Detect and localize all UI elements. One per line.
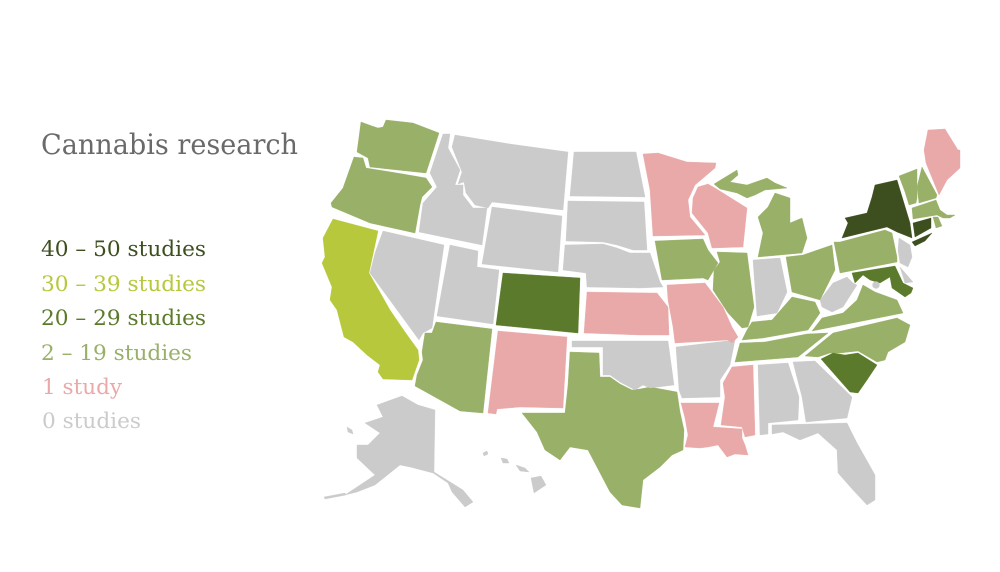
state: Rhode Island [933, 217, 942, 228]
state: Minnesota [643, 153, 716, 236]
state: Virginia [812, 285, 903, 331]
state: Oregon [331, 157, 432, 233]
state: Michigan [714, 170, 807, 257]
Michigan upper peninsula [714, 170, 787, 198]
state: Maryland [852, 266, 913, 297]
legend item: 40 to 50 studies: 40 – 50 studies [41, 237, 206, 262]
state: South Dakota [566, 201, 647, 250]
state: Nevada [370, 231, 444, 340]
title: Cannabis research [41, 128, 298, 161]
state: Florida [772, 423, 875, 505]
legend item: 30 to 39 studies: 30 – 39 studies [41, 272, 206, 297]
state: Kentucky [742, 297, 820, 340]
Michigan lower peninsula [758, 193, 807, 257]
legend item: 2 to 19 studies: 2 – 19 studies [41, 341, 192, 366]
Kauai [483, 451, 488, 456]
legend item: 1 study: 1 study [42, 375, 123, 400]
District of Columbia [872, 282, 880, 288]
state: Indiana [753, 258, 787, 316]
state: Vermont [899, 169, 917, 205]
state: Wyoming [482, 207, 562, 272]
state: Massachusetts [912, 200, 955, 219]
state: Montana [452, 135, 568, 210]
state: Alaska [324, 396, 473, 507]
state: Idaho [419, 134, 487, 245]
state: Connecticut [913, 218, 931, 237]
state: Texas [522, 352, 684, 508]
legend item: 0 studies: 0 studies [42, 409, 141, 434]
Hawaii big island [531, 476, 546, 493]
Maui [516, 465, 529, 472]
state: New Mexico [488, 331, 567, 414]
state: North Dakota [570, 152, 645, 197]
state: Louisiana [681, 403, 748, 457]
state: New York [842, 180, 932, 246]
state: Nebraska [563, 244, 663, 288]
Long Island [912, 233, 932, 246]
state: Colorado [496, 273, 580, 333]
state: Ohio [786, 245, 835, 300]
legend [41, 237, 206, 434]
state: Arkansas [676, 340, 735, 398]
state: New Hampshire [917, 167, 937, 203]
state: Utah [437, 245, 499, 324]
state: Hawaii [483, 451, 546, 493]
state: Mississippi [721, 365, 755, 437]
state: Pennsylvania [834, 230, 897, 273]
state: Delaware [900, 267, 913, 283]
Aleutian islands [324, 493, 346, 499]
Oahu [501, 458, 509, 463]
state: Oklahoma [572, 341, 674, 390]
state: Washington [357, 120, 439, 173]
legend item: 20 to 29 studies: 20 – 29 studies [41, 306, 206, 331]
state: Wisconsin [692, 184, 747, 248]
state: North Carolina [805, 318, 910, 362]
Nunivak island [347, 427, 353, 434]
state: Arizona [415, 322, 492, 413]
state: Kansas [584, 292, 669, 335]
state: Iowa [655, 239, 718, 280]
state: Maine [924, 129, 960, 195]
state: Tennessee [735, 333, 828, 362]
Alaska mainland [345, 396, 473, 507]
state: Illinois [713, 252, 754, 328]
state: Alabama [758, 363, 799, 435]
state: California [322, 219, 419, 380]
state: Missouri [667, 283, 738, 343]
state: South Carolina [821, 353, 877, 393]
New York mainland [842, 180, 912, 238]
state: West Virginia [820, 277, 857, 312]
state: Georgia [793, 361, 852, 422]
map of the United States [322, 120, 960, 508]
state: New Jersey [898, 238, 912, 267]
